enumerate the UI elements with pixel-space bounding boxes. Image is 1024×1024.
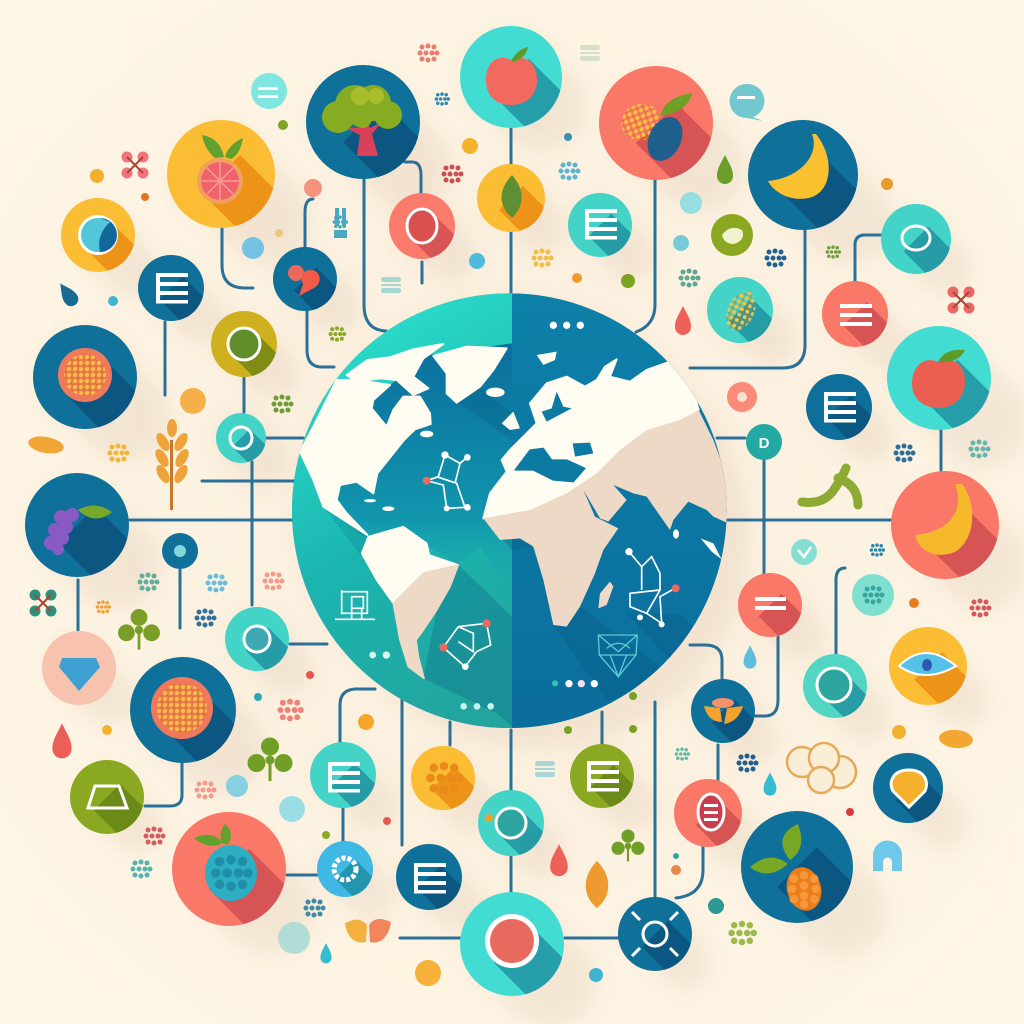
icon disc: list bottom bbox=[396, 844, 462, 910]
outlines bbox=[180, 179, 817, 954]
globe: continent shadows bbox=[323, 387, 710, 727]
icon disc: apple right bbox=[887, 326, 991, 430]
icon disc: bowl left bbox=[33, 325, 137, 429]
flowers and clover bbox=[30, 152, 974, 861]
icon disc: list coral lower bbox=[738, 573, 802, 637]
icon disc: bowl lower bbox=[130, 657, 236, 763]
small rocket icon bbox=[334, 208, 347, 238]
icon disc: tree bbox=[306, 65, 420, 179]
icon disc: grapefruit bbox=[167, 120, 275, 228]
globe: molecule one bbox=[430, 456, 466, 510]
icon disc: diamond bbox=[42, 631, 116, 705]
globe: Iceland bbox=[486, 388, 505, 397]
icon disc: D badge bbox=[746, 424, 782, 460]
icon disc: grapes bbox=[25, 473, 129, 577]
icon disc: orange berries bbox=[741, 811, 853, 923]
icon disc: banana top right bbox=[748, 120, 858, 230]
icon disc: corn bbox=[707, 277, 773, 343]
globe: blue right hemisphere bbox=[512, 290, 732, 733]
icon disc: gauge bbox=[61, 198, 135, 272]
icon disc: list olive bbox=[570, 744, 634, 808]
icon disc: leafy seeds bbox=[691, 679, 755, 743]
butterfly bbox=[345, 919, 391, 943]
drops bbox=[52, 155, 776, 963]
globe: molecule three bbox=[443, 623, 491, 667]
icon disc: olive small bbox=[711, 214, 753, 256]
wheat bbox=[153, 419, 191, 510]
icon disc: D badge: D bbox=[759, 435, 770, 452]
green beans bbox=[802, 468, 858, 505]
icon disc: list navy bbox=[806, 374, 872, 440]
icon disc: banana right bbox=[891, 471, 999, 579]
globe: Arctic islands bbox=[347, 344, 443, 395]
icon disc: scale bbox=[70, 760, 144, 834]
globe: teal left hemisphere bbox=[290, 290, 512, 733]
globe bbox=[290, 290, 732, 733]
icon disc: list top bbox=[568, 193, 632, 257]
globe: North America bbox=[300, 380, 431, 535]
globe: ocean bbox=[338, 343, 512, 556]
badge: equals bbox=[251, 73, 287, 109]
round dots bbox=[90, 120, 919, 986]
icon disc: list coral bbox=[822, 281, 888, 347]
icon disc: grain bowl bbox=[460, 892, 564, 996]
icon disc: small navy bbox=[162, 533, 198, 569]
globe: Africa and south Asia bbox=[483, 410, 728, 627]
icon disc: list teal lower bbox=[310, 742, 376, 808]
icon disc: peach bbox=[273, 247, 337, 311]
speech bubble bbox=[729, 84, 764, 121]
globe: white dots bbox=[369, 322, 598, 710]
icon disc: pin ring bbox=[389, 193, 455, 259]
icon disc: olive bag bbox=[211, 311, 277, 377]
globe: Greenland bbox=[433, 347, 507, 403]
icon disc: apple top bbox=[460, 26, 562, 128]
icon disc: eye bbox=[889, 627, 967, 705]
leaves bbox=[27, 434, 974, 908]
icon disc: list left bbox=[138, 255, 204, 321]
globe: molecule two bbox=[629, 552, 675, 623]
icon disc: orange cluster bbox=[411, 746, 475, 810]
globe: circuit icon bbox=[335, 590, 375, 619]
clusters bbox=[96, 44, 991, 945]
connector lines bbox=[78, 128, 941, 938]
globe: Eurasia and north Africa bbox=[483, 352, 699, 518]
lock arch bbox=[873, 840, 902, 871]
icon disc: ring teal bbox=[225, 607, 289, 671]
icon disc: ring bbox=[216, 413, 266, 463]
icon disc: hook bbox=[803, 654, 867, 718]
icon disc: shield bbox=[873, 753, 943, 823]
globe: diamond icon bbox=[598, 635, 637, 677]
icon disc: wave bbox=[478, 790, 544, 856]
soft long shadows bbox=[77, 77, 985, 984]
globe: South America bbox=[362, 527, 458, 678]
globe: Madagascar bbox=[598, 582, 613, 608]
icon disc: coral list oval bbox=[674, 779, 742, 847]
burgers bbox=[381, 45, 600, 777]
icon disc: gear bbox=[317, 841, 373, 897]
icon disc: leaf bbox=[477, 164, 545, 232]
icon disc: apple outline bbox=[881, 204, 951, 274]
icon disc: blueberries bbox=[172, 812, 286, 926]
icon disc: circuit bbox=[618, 897, 692, 971]
icon disc: pale teal pattern bbox=[852, 574, 894, 616]
cauliflower bbox=[787, 743, 856, 793]
globe: islands bbox=[364, 431, 722, 559]
icon disc: berries bbox=[599, 66, 713, 180]
